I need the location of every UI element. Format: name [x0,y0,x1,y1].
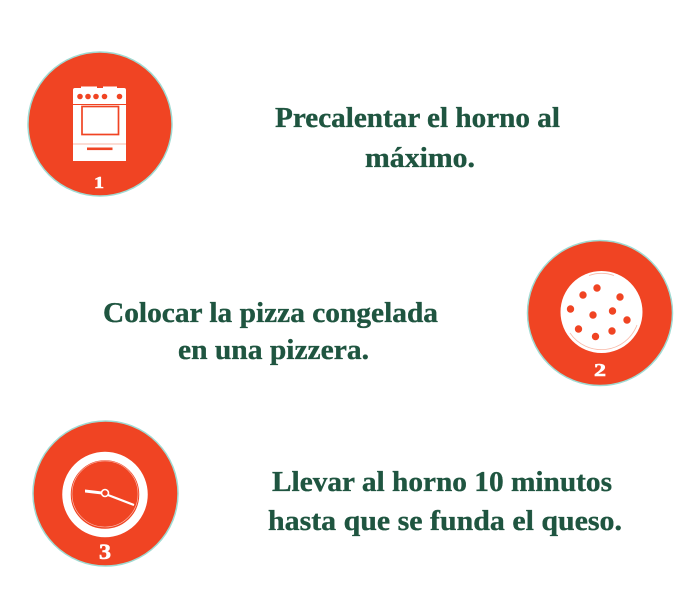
step 1 text: Precalentar el horno al [275,102,560,134]
step 1 icon: oven badge [28,52,172,196]
step 3 text [268,466,622,537]
step number 2: 2 [594,360,606,380]
step 2 icon: pizza badge [528,240,672,386]
icon: oven [73,86,126,161]
step 2 text: en una pizzera. [178,334,369,366]
step 3 text: Llevar al horno 10 minutos [272,466,612,498]
step number 1: 1 [94,173,104,192]
step number 3: 3 [99,539,111,564]
icon: clock [66,456,144,533]
step 2 text [103,297,439,366]
step 2 text: Colocar la pizza congelada [103,297,439,329]
step 1 text [275,102,560,174]
step 3 text: hasta que se funda el queso. [268,505,622,537]
icon: pizza [560,271,642,353]
step 3 icon: clock badge [33,421,178,566]
step 1 text: máximo. [365,142,475,174]
